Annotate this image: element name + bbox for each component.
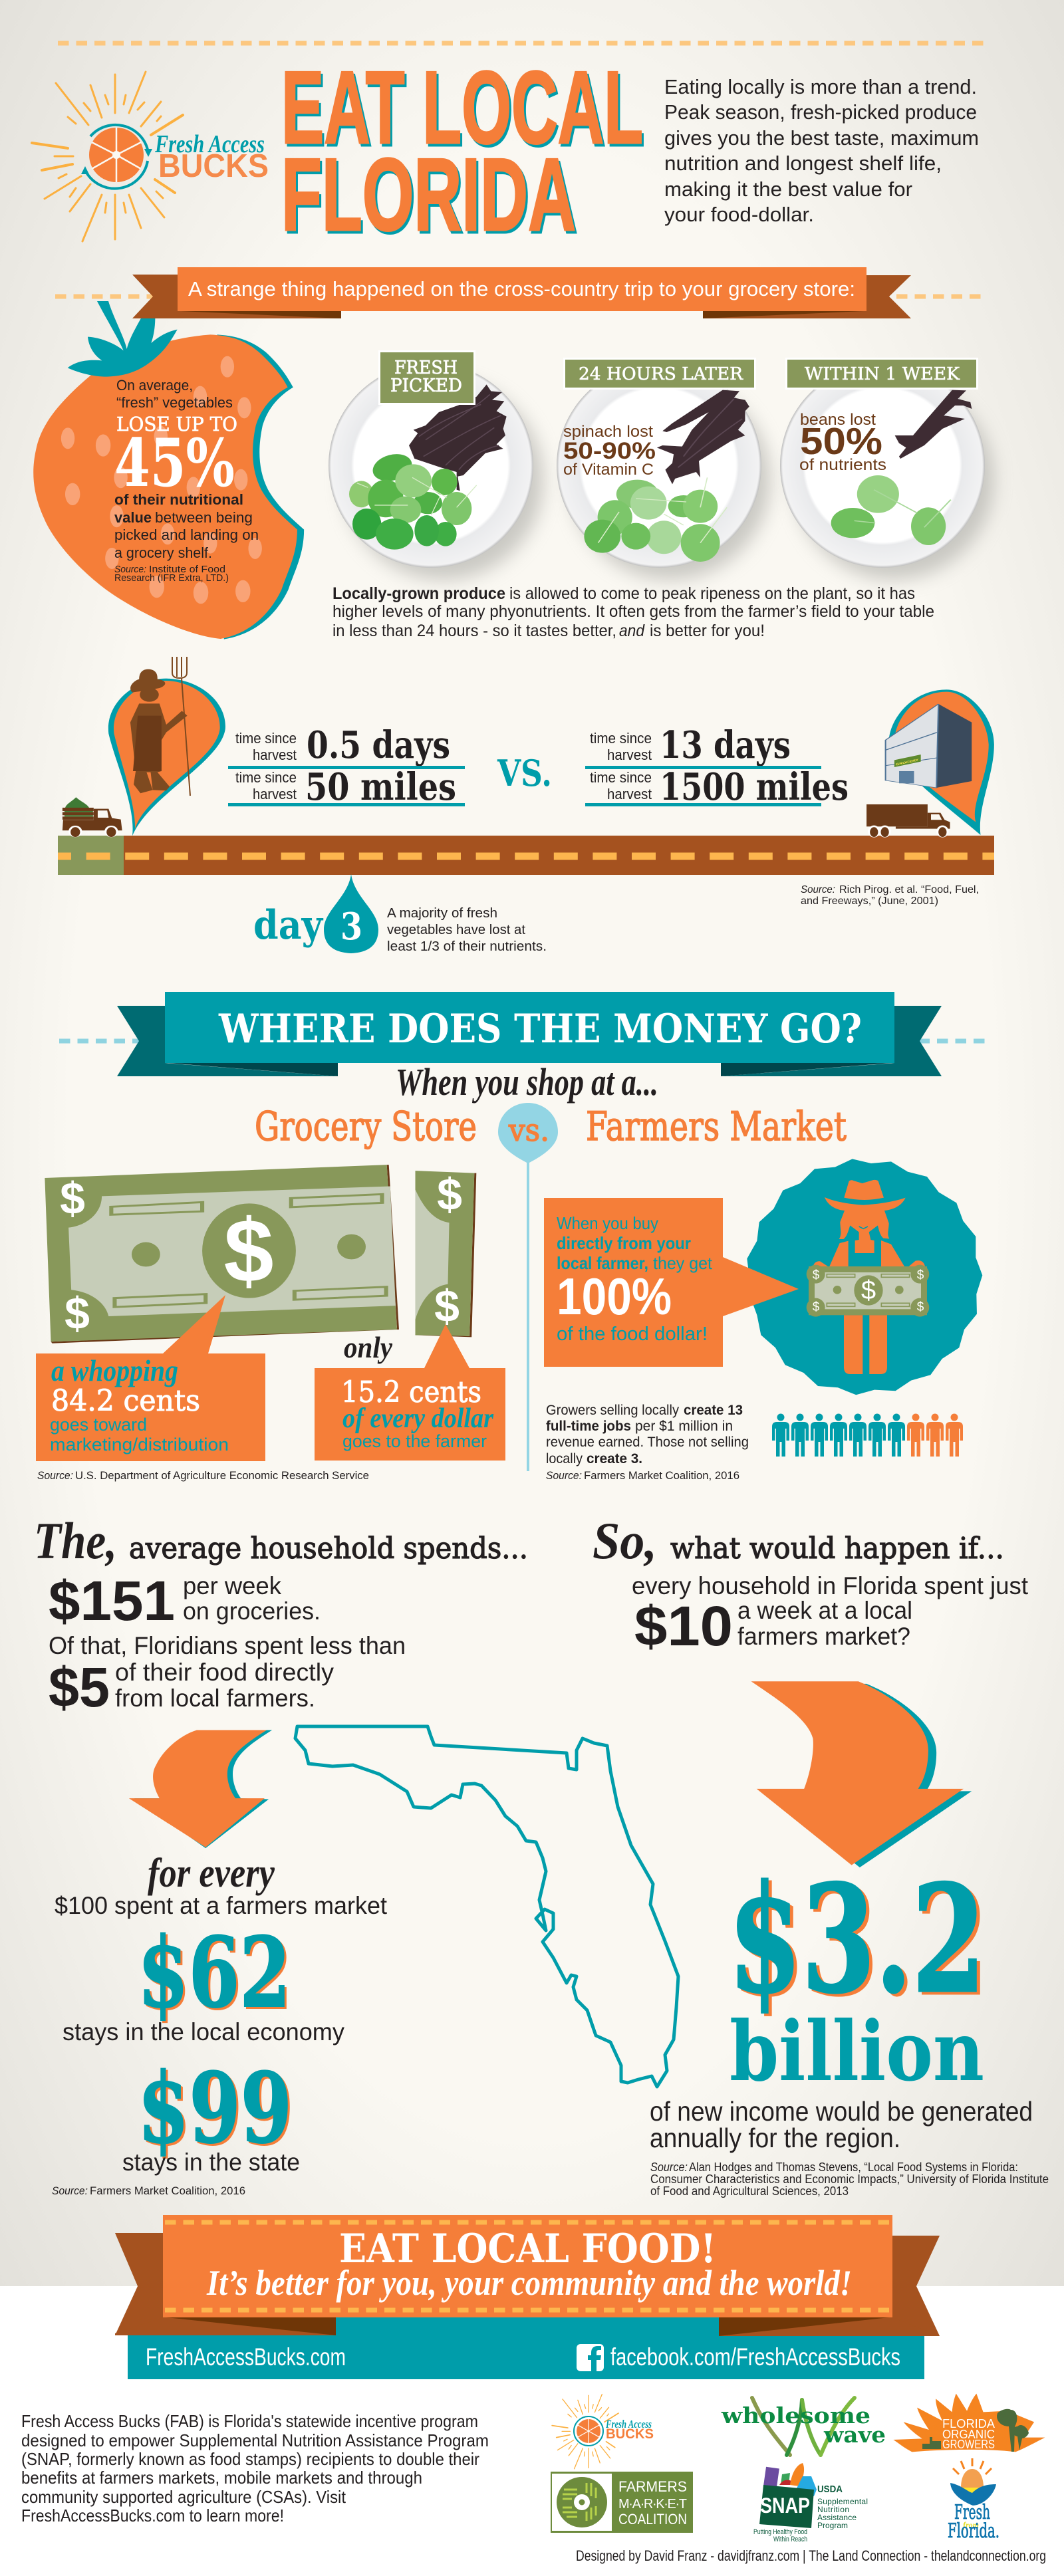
text: 10 dollars a week [632, 1572, 1029, 1657]
text: for every 100 dollars: for every [148, 1851, 275, 1896]
spinach leaves [584, 477, 727, 562]
title: Eat Local Florida: FLORIDA [281, 137, 576, 252]
stat: 3.2 billion: billion [730, 2004, 984, 2100]
logo: Fresh from Florida [948, 2458, 999, 2543]
text: 151 dollars per week: Of that, Floridians spent less than [49, 1632, 406, 1659]
plate text: spinach [563, 423, 656, 479]
ribbon: strange thing happened: A strange thing happened on the cross-country trip to your grocery store: [188, 277, 855, 300]
strawberry text: LOSE UP TO [116, 413, 237, 435]
stats: grocery time and miles: harvest [607, 786, 652, 802]
growers text and source: revenue earned. Those not selling [546, 1435, 749, 1450]
logo: SNAP: Assistance [817, 2513, 857, 2522]
logo: Florida Organic Growers: ORGANIC [942, 2428, 995, 2441]
purple beans [409, 384, 507, 491]
logo: Florida Organic Growers: GROWERS [942, 2438, 995, 2451]
logo: Fresh from Florida: Florida. [948, 2519, 999, 2543]
source: Hodges and Stevens [650, 2161, 1049, 2198]
source: Hodges and Stevens: Source: [650, 2161, 688, 2174]
icon: farmer pin [108, 657, 225, 836]
spinach leaves [349, 450, 477, 550]
about paragraph [21, 2411, 489, 2525]
logo: Farmers Market Coalition: COALITION [618, 2511, 687, 2527]
logo wordmark: BUCKS [158, 148, 269, 184]
logo: Farmers Market Coalition [551, 2472, 693, 2533]
about paragraph: FreshAccessBucks.com to learn more! [21, 2506, 284, 2525]
text: for every 100 dollars [55, 1851, 388, 1919]
stats: local farm time and miles [228, 723, 465, 809]
ribbon: where does the money go: WHERE DOES THE MONEY GO? [218, 1006, 862, 1052]
growers text and source: full-time jobs [546, 1419, 631, 1434]
purple beans [657, 390, 749, 484]
callout: 15.2 cents: goes to the farmer [342, 1431, 487, 1451]
strawberry text [114, 377, 259, 584]
icon: grocery store pin: GROCERY [896, 759, 919, 766]
plate [557, 363, 770, 580]
strawberry text: 45% [114, 425, 235, 502]
label: VS: VS. [497, 752, 552, 794]
icon: delivery truck [866, 804, 950, 838]
callout: 84.2 cents: 84.2 cents [51, 1384, 200, 1418]
day label: day [253, 902, 324, 949]
heading: so what would happen if: what would happen if... [670, 1532, 1004, 1566]
about paragraph: (SNAP, formerly known as food stamps) recipients to double their [21, 2449, 479, 2469]
intro paragraph: your food-dollar. [664, 203, 814, 226]
stat: 99 dollars: stays in the state [122, 2149, 300, 2176]
logo: SNAP: Nutrition [817, 2505, 849, 2514]
logo: SNAP: Program [817, 2521, 848, 2530]
stats: grocery time and miles: harvest [607, 747, 652, 763]
arrow: right orange [751, 1681, 972, 1867]
small bill: $ [917, 1268, 924, 1282]
intro paragraph: Eating locally is more than a trend. [664, 75, 977, 98]
panel: plate within 1 week [780, 358, 994, 580]
strawberry text: Institute of Food [149, 564, 225, 575]
intro paragraph: nutrition and longest shelf life, [664, 152, 942, 175]
logo: Farmers Market Coalition: M·A·R·K·E·T [618, 2497, 687, 2512]
plate text: beans: 50% [800, 420, 882, 463]
source: Hodges and Stevens: Consumer Characteristics and Economic Impacts,” University of Florida Institute [650, 2172, 1049, 2186]
spinach leaves [831, 475, 951, 545]
text: 10 dollars a week: farmers market? [737, 1623, 910, 1650]
callout: 100 percent: local farmer, [557, 1253, 648, 1273]
tag: 24 hours later [563, 358, 756, 390]
plate text: beans: of nutrients [799, 456, 886, 474]
text: 151 dollars per week: from local farmers. [115, 1685, 315, 1712]
second dotted rule [55, 294, 986, 299]
ribbon: eat local food: EAT LOCAL FOOD! [339, 2226, 716, 2272]
panel: strawberry stat [33, 301, 304, 640]
text: new income: annually for the region. [650, 2123, 900, 2153]
callout: 15.2 cents: of every dollar [342, 1403, 494, 1434]
farmer figure [813, 1180, 925, 1374]
growers text and source: Farmers Market Coalition, 2016 [584, 1469, 739, 1482]
text: new income: of new income would be generated [650, 2096, 1033, 2127]
logo: Fresh Access Bucks [32, 72, 269, 241]
bar: website links: FreshAccessBucks.com [146, 2343, 346, 2371]
growers text and source: per $1 million in [635, 1419, 733, 1434]
logo: SNAP [753, 2463, 868, 2543]
logo wordmark: Fresh Access [154, 130, 265, 158]
logo orange fruit [81, 125, 152, 189]
about paragraph: community supported agriculture (CSAs). Visit [21, 2487, 346, 2507]
text: 10 dollars a week: a week at a local [737, 1597, 912, 1624]
logo: Florida Organic Growers [893, 2394, 1045, 2452]
logo wordmark [154, 130, 269, 184]
strawberry text: between being [155, 509, 253, 526]
heading: the average household spends: average household spends... [129, 1532, 528, 1566]
logo: SNAP: USDA [817, 2484, 843, 2495]
heading: when you shop at a: When you shop at a... [396, 1060, 658, 1104]
panel: plate 24 hours later [557, 358, 770, 580]
icon: facebook [577, 2344, 604, 2371]
callout: 100 percent: directly from your [557, 1233, 691, 1253]
icon: pickup truck [63, 797, 122, 837]
logo: wholesome wave [721, 2398, 886, 2455]
strawberry leaves [68, 301, 178, 377]
day 3 text: A majority of fresh [387, 906, 497, 921]
balloon [498, 1103, 558, 1471]
logo: wholesome wave: wholesome [721, 2402, 870, 2428]
tag: within 1 week [785, 358, 978, 390]
logo: SNAP: Within Reach [773, 2535, 807, 2543]
strawberry text: “fresh” vegetables [116, 394, 233, 411]
tag: 24 hours later: 24 HOURS LATER [579, 364, 743, 384]
logo: SNAP: Putting Healthy Food [753, 2528, 807, 2536]
small bill: $ [917, 1300, 924, 1314]
strawberry text: value [114, 509, 152, 526]
strawberry text: On average, [116, 377, 193, 394]
callout: 100 percent: they get [653, 1253, 713, 1273]
ribbon: strange thing happened [132, 267, 911, 318]
logo: Fresh Access Bucks small: Fresh Access [605, 2418, 652, 2430]
source: Hodges and Stevens: of Food and Agricultural Sciences, 2013 [650, 2184, 849, 2198]
locally-grown paragraph: and [619, 622, 645, 640]
small bill: $ [861, 1276, 876, 1305]
locally-grown paragraph: in less than 24 hours - so it tastes better, [332, 622, 616, 640]
small bill [807, 1265, 929, 1317]
stats: local farm time and miles: harvest [253, 747, 297, 763]
tag: within 1 week: WITHIN 1 WEEK [805, 364, 960, 384]
ribbon: eat local food: It’s better for you, your community and the world! [206, 2263, 852, 2303]
logo: SNAP: SNAP [760, 2494, 810, 2517]
heading: so what would happen if: So, [593, 1512, 657, 1570]
icon: large dollar bill: $ [65, 1288, 90, 1339]
logo: Florida Organic Growers: FLORIDA [942, 2417, 995, 2430]
ribbon: where does the money go [117, 992, 942, 1076]
purple beans [895, 390, 972, 459]
growers text and source: Growers selling locally [546, 1403, 679, 1418]
ribbon: eat local food [115, 2215, 940, 2336]
bar: website links: facebook.com/FreshAccessBucks [610, 2343, 900, 2371]
text: 10 dollars a week: $10 [634, 1595, 733, 1657]
tag: fresh picked: PICKED [390, 376, 462, 396]
stats: grocery time and miles: 1500 miles [660, 765, 849, 809]
strawberry text: picked and landing on [114, 527, 259, 543]
drop [324, 874, 378, 953]
title: Eat Local Florida [281, 50, 645, 255]
source: farmers market coalition: Farmers Market Coalition, 2016 [90, 2184, 245, 2197]
stats: grocery time and miles [585, 723, 849, 809]
drop numeral: 3 [340, 905, 362, 949]
stat: 3.2 billion [728, 1853, 989, 2100]
locally-grown paragraph: is better for you! [650, 622, 765, 640]
top dotted rule [58, 41, 988, 45]
callout: 84.2 cents: a whopping [51, 1353, 178, 1387]
stats: grocery time and miles: 13 days [660, 723, 791, 767]
bar: website links [128, 2317, 924, 2379]
intro paragraph: gives you the best taste, maximum [664, 126, 979, 150]
text: 151 dollars per week: $5 [49, 1656, 110, 1718]
stat: 62 dollars: $62 [140, 1919, 293, 2032]
grocery store label: Grocery Store [255, 1104, 477, 1150]
callout: 84.2 cents [36, 1295, 265, 1461]
logo: SNAP: Supplemental [817, 2497, 868, 2506]
heading: the average household spends [34, 1512, 528, 1570]
text: 151 dollars per week: per week [183, 1572, 281, 1599]
source: USDA: U.S. Department of Agriculture Economic Research Service [75, 1469, 369, 1482]
icon: grocery store pin [886, 689, 994, 835]
stats: local farm time and miles: 50 miles [305, 765, 456, 809]
text: 151 dollars per week: on groceries. [183, 1597, 321, 1625]
farmers market label: Farmers Market [586, 1104, 847, 1150]
source: Rich Pirog: Source: [801, 884, 835, 895]
heading: the average household spends: The, [34, 1512, 117, 1570]
teal dotted rule [59, 1038, 986, 1044]
icon: small dollar bill slice: $ [434, 1281, 460, 1332]
plate text: beans [799, 411, 886, 474]
stats: local farm time and miles: 0.5 days [307, 723, 450, 767]
logo: Farmers Market Coalition: FARMERS [618, 2478, 687, 2495]
strawberry text: of their nutritional [114, 491, 243, 508]
stat: 99 dollars: $99 [140, 2054, 294, 2167]
callout: 84.2 cents: marketing/distribution [50, 1435, 229, 1455]
day 3 text [387, 906, 547, 954]
stats: local farm time and miles: time since [235, 769, 297, 786]
logo: Fresh Access Bucks small [552, 2395, 654, 2469]
stat: 62 dollars [63, 1917, 344, 2046]
label: only: only [344, 1330, 393, 1364]
growers text and source: locally [546, 1451, 583, 1466]
strawberry text: Source: [114, 564, 146, 575]
stat: 99 dollars: $99 [138, 2052, 292, 2165]
plate text: spinach: of Vitamin C [563, 461, 654, 479]
logo: Fresh Access Bucks small: BUCKS [606, 2426, 654, 2442]
stats: local farm time and miles: time since [235, 730, 297, 747]
source: USDA: Source: [37, 1469, 73, 1482]
intro paragraph: Peak season, fresh-picked produce [664, 100, 977, 124]
icon: woman farmer holding a bill [747, 1159, 982, 1395]
stat: 62 dollars: stays in the local economy [63, 2018, 344, 2046]
strawberry text: Research (IFR Extra, LTD.) [114, 572, 229, 584]
icon: ten people jobs pictogram [772, 1413, 963, 1457]
heading: so what would happen if [593, 1512, 1004, 1570]
icon: large dollar bill [45, 1165, 399, 1344]
road [58, 836, 994, 875]
about paragraph: Fresh Access Bucks (FAB) is Florida's statewide incentive program [21, 2411, 478, 2431]
callout: 15.2 cents [315, 1324, 505, 1461]
vs label: vs. [508, 1112, 549, 1148]
title: Eat Local Florida: EAT LOCAL [281, 50, 643, 165]
stat: 99 dollars [122, 2052, 300, 2176]
logo: Fresh from Florida: Fresh [954, 2501, 990, 2524]
source: Rich Pirog [801, 884, 979, 907]
day 3 text: vegetables have lost at [387, 923, 525, 937]
intro paragraph [664, 75, 979, 226]
callout: 15.2 cents: 15.2 cents [341, 1375, 481, 1409]
text: for every 100 dollars: $100 spent at a farmers market [55, 1892, 388, 1919]
callout: 100 percent: When you buy [557, 1213, 658, 1233]
source: Rich Pirog: Rich Pirog. et al. “Food, Fuel, [839, 884, 979, 895]
day 3 text: least 1/3 of their nutrients. [387, 939, 547, 954]
map: Florida outline [295, 1726, 678, 2087]
tag: fresh picked: FRESH [394, 358, 458, 378]
locally-grown paragraph: is allowed to come to peak ripeness on the plant, so it has [509, 584, 915, 603]
locally-grown paragraph: higher levels of many phyonutrients. It often gets from the farmer’s field to your table [332, 602, 934, 621]
icon: large dollar bill: $ [223, 1201, 274, 1301]
locally-grown paragraph [332, 584, 934, 640]
small bill: $ [813, 1300, 820, 1314]
stats: grocery time and miles: time since [590, 730, 652, 747]
growers text and source: create 3. [587, 1451, 642, 1466]
panel: plate fresh picked [329, 350, 543, 580]
small bill: $ [813, 1268, 820, 1282]
plate [329, 363, 543, 580]
strawberry body [33, 334, 304, 640]
teal badge [747, 1159, 982, 1395]
icon: small dollar bill slice [415, 1169, 476, 1337]
icon: small dollar bill slice: $ [437, 1169, 462, 1220]
arrow: left orange [129, 1730, 272, 1848]
text: 151 dollars per week: of their food directly [115, 1659, 334, 1686]
text: 151 dollars per week: $151 [49, 1570, 175, 1632]
intro paragraph: making it the best value for [664, 177, 912, 201]
icon: large dollar bill: $ [60, 1173, 85, 1224]
logo: Fresh from Florida: from [963, 2521, 979, 2531]
tag: fresh picked [378, 350, 475, 405]
about paragraph: designed to empower Supplemental Nutrition Assistance Program [21, 2430, 489, 2450]
callout: 100 percent: 100% [557, 1267, 672, 1326]
growers text and source: create 13 [684, 1403, 743, 1418]
growers text and source [546, 1403, 749, 1482]
title: Eat Local Florida: FLORIDA [283, 140, 578, 255]
about paragraph: benefits at farmers markets, mobile markets and through [21, 2468, 422, 2488]
stats: grocery time and miles: time since [590, 769, 652, 786]
text: 10 dollars a week: every household in Florida spent just [632, 1572, 1029, 1599]
plate text: spinach: 50-90% [563, 438, 656, 464]
comparison heading [255, 1103, 847, 1471]
callout: day 3 [253, 874, 547, 954]
strawberry text: a grocery shelf. [114, 544, 212, 561]
callout: 100 percent: of the food dollar! [557, 1324, 708, 1345]
source: Rich Pirog: and Freeways,” (June, 2001) [801, 895, 938, 907]
source: farmers market coalition: Source: [52, 2184, 88, 2197]
logo sun rays [32, 72, 183, 241]
plate text: beans: beans lost [800, 411, 876, 429]
plate [780, 363, 994, 580]
plate text: spinach: spinach lost [563, 423, 653, 441]
text: 151 dollars per week [49, 1570, 406, 1718]
source: Hodges and Stevens: Alan Hodges and Thomas Stevens, “Local Food Systems in Florida: [689, 2161, 1018, 2174]
callout: 84.2 cents: goes toward [50, 1415, 147, 1435]
locally-grown paragraph: Locally-grown produce [332, 584, 505, 603]
stat: 62 dollars: $62 [138, 1917, 291, 2030]
stats: local farm time and miles: harvest [253, 786, 297, 802]
text: new income [650, 2096, 1033, 2153]
callout: 100 percent [544, 1198, 799, 1367]
title: Eat Local Florida: EAT LOCAL [283, 53, 645, 168]
growers text and source: Source: [546, 1469, 582, 1482]
logo: wholesome wave: wave [823, 2422, 886, 2448]
